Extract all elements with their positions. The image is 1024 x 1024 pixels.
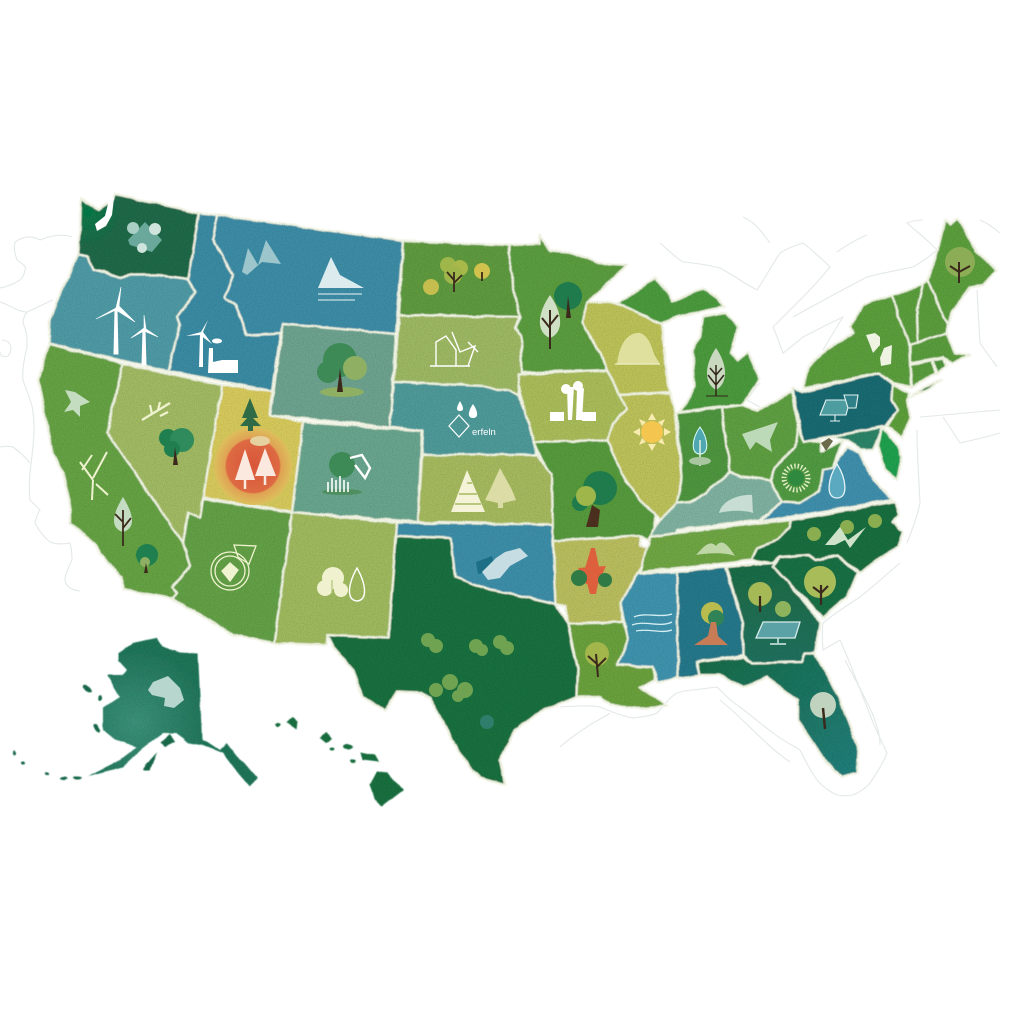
state: Delaware and eastern shore <box>878 427 902 480</box>
state: Massachusetts <box>910 333 970 363</box>
state: Nevada <box>107 364 222 543</box>
icon: North Dakota trees <box>423 257 490 295</box>
icon: Kansas white cone and pale pine <box>451 468 516 512</box>
state: Oregon <box>49 255 195 371</box>
icon: Pennsylvania solar panel <box>820 395 858 421</box>
icon: Michigan pale tree <box>706 348 728 396</box>
icon: Minnesota pale and dark trees <box>540 282 582 349</box>
icon: Maine tree <box>945 247 975 283</box>
icon: Virginia water drop <box>829 464 845 498</box>
state: Illinois <box>608 393 682 520</box>
icon: New York white dogs <box>866 333 892 366</box>
state: Wisconsin <box>582 302 670 395</box>
state: New Mexico <box>274 512 397 645</box>
icon: Wyoming tree <box>317 343 367 397</box>
state: Kentucky <box>650 472 782 537</box>
state map <box>12 194 997 806</box>
icon: Utah fire circle with trees and pine <box>214 398 292 505</box>
state: Mississippi <box>617 572 678 682</box>
icon: Wisconsin pale dome <box>615 333 660 364</box>
state: Tennessee <box>640 520 792 572</box>
icon: Ohio pale wing <box>742 422 778 452</box>
state: Kansas <box>418 455 553 525</box>
water contour lines <box>0 217 1000 796</box>
icon: Mississippi water lines <box>632 614 672 631</box>
state: New Jersey <box>887 385 910 437</box>
icon: Georgia trees and solar panel <box>748 582 800 644</box>
label: Nebraska caption: erfeln <box>472 427 496 438</box>
state: Alabama <box>677 567 743 678</box>
state: Indiana <box>677 408 730 503</box>
icon: Arizona ring emblem with leaf <box>211 545 256 590</box>
state: Rhode Island <box>933 358 947 373</box>
icon: North Carolina bush and white bird <box>807 514 882 548</box>
state: Vermont <box>892 285 923 345</box>
icon: Idaho turbine and factory <box>186 320 238 373</box>
state: Georgia <box>726 563 820 663</box>
icon: Indiana teal drop and tree <box>689 427 711 466</box>
state: Texas <box>327 536 578 785</box>
icon: Alaska pale leaf patch <box>148 676 184 708</box>
state: Washington <box>78 194 199 279</box>
state: Arizona <box>172 499 292 643</box>
icon: Nebraska water drops and seal <box>449 401 496 438</box>
state: Maryland <box>830 427 883 450</box>
icon: South Dakota outlined house <box>430 332 478 366</box>
icon: Iowa factory <box>550 381 596 421</box>
Puget Sound and Green Bay water cut-outs <box>95 192 678 347</box>
icon: Alabama tree <box>694 602 728 645</box>
icon: California bird, trees <box>64 390 158 573</box>
West Virginia panhandle patch <box>821 438 833 451</box>
icon: Missouri tree <box>572 471 617 527</box>
icon: Colorado tree and grass <box>322 452 370 495</box>
state: Utah <box>203 385 303 511</box>
icon: Montana mountain and waves <box>318 257 364 300</box>
icon: Washington pale blotches <box>127 222 162 253</box>
state: Maine <box>928 218 997 325</box>
icon: Oklahoma cloud-like bird <box>476 548 528 580</box>
icon: South Carolina tree <box>804 566 836 605</box>
icon: Louisiana tree <box>585 642 609 677</box>
state: Florida <box>697 653 858 777</box>
state: North Dakota <box>399 241 520 317</box>
state: Colorado <box>292 422 422 522</box>
state: Michigan upper peninsula <box>618 277 725 323</box>
icon: Tennessee pale wing <box>696 543 735 556</box>
icon: New Mexico white tree and drop <box>317 567 365 601</box>
state: Wyoming <box>270 324 396 427</box>
icon: Arkansas red figure and trees <box>571 548 612 594</box>
state: South Dakota <box>394 315 522 395</box>
state: Iowa <box>518 370 627 442</box>
Hawaii islands <box>274 717 403 806</box>
state: West Virginia <box>770 423 843 503</box>
state: Pennsylvania <box>793 373 898 442</box>
state: New York <box>803 295 911 388</box>
icon: Nevada tree and white branch <box>142 402 194 465</box>
icon: Florida tree <box>810 692 836 729</box>
state: Louisiana <box>568 622 668 708</box>
icon: Oregon wind turbines <box>96 287 158 365</box>
state: Missouri <box>534 440 655 541</box>
state: Ohio <box>722 392 798 480</box>
state: Minnesota <box>510 235 627 373</box>
state: South Carolina <box>772 555 857 618</box>
state: New Hampshire <box>917 280 947 343</box>
state: Arkansas <box>553 536 648 623</box>
Alaska islands <box>12 683 175 780</box>
state: Nebraska <box>390 382 537 455</box>
state: Connecticut <box>910 360 935 387</box>
state: North Carolina <box>752 502 903 573</box>
icon: Montana pale mountains <box>242 240 281 275</box>
state: California <box>38 344 190 598</box>
state: Virginia <box>760 447 892 522</box>
state: Montana <box>213 215 403 335</box>
icon: West Virginia sun ring <box>784 466 808 490</box>
state: Idaho <box>168 213 281 391</box>
icon: Texas pale green tree clusters <box>421 633 514 729</box>
icon: Kentucky pale shape <box>719 495 753 513</box>
state: Alaska <box>88 638 258 787</box>
state: Oklahoma <box>396 523 556 604</box>
icon: Illinois sun <box>633 413 671 451</box>
state: Michigan lower peninsula <box>680 313 760 412</box>
state: Long Island <box>910 380 942 397</box>
